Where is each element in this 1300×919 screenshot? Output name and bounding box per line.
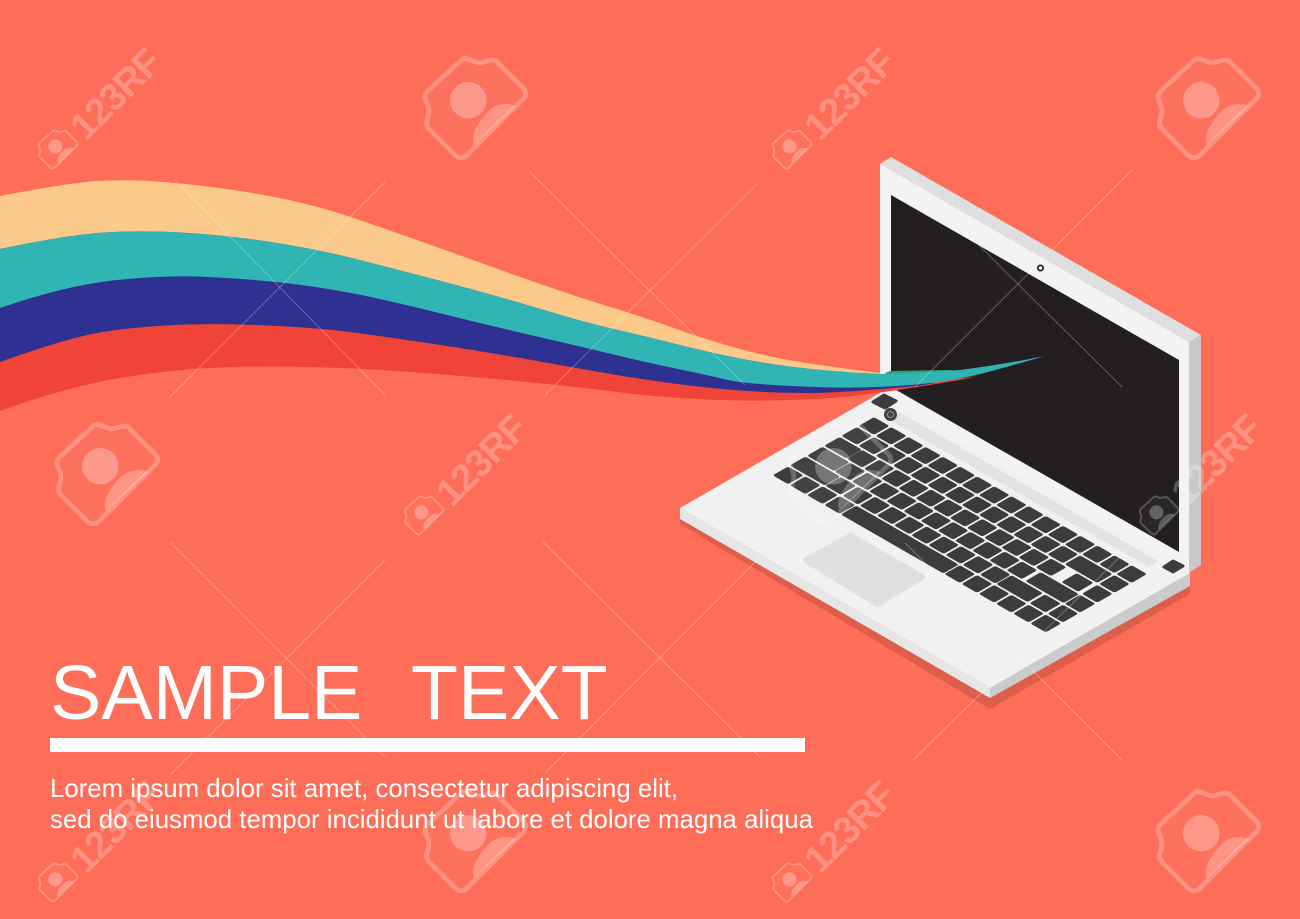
watermark top centre [773,42,903,169]
laptop base front edges [680,508,1190,698]
watermark bottom centre: 123RF [797,775,903,881]
watermark top centre: 123RF [797,42,903,148]
ribbon band: blue [0,231,935,393]
touchpad [806,536,922,604]
watermark middle right [1140,408,1270,535]
watermark middle left: 123RF [429,408,535,514]
watermark lines [170,170,1132,775]
top key [873,395,896,408]
keyboard [774,418,1146,631]
watermark top left [39,42,169,169]
side key [1164,561,1183,572]
watermark bottom left: 123RF [63,775,169,881]
body text [50,775,814,834]
title: SAMPLE [50,650,362,736]
watermark middle left [405,408,535,535]
screen display [891,195,1179,552]
ribbon band: peach [0,180,885,388]
watermark bottom centre [773,775,903,902]
ribbon band: red [0,276,978,411]
watermark top left: 123RF [63,42,169,148]
title: TEXT [411,650,608,736]
laptop illustration [680,157,1201,709]
ribbon band: green sliver [885,370,962,377]
laptop base top [680,393,1190,688]
watermark bottom left [39,775,169,902]
laptop ground shadow [680,516,1190,709]
icon: webcam [1038,265,1043,271]
hinge strip [891,412,1158,567]
body text: Lorem ipsum dolor sit amet, consectetur adipiscing elit, [50,775,678,803]
laptop screen lid [880,157,1201,573]
watermark middle right: 123RF [1164,408,1270,514]
title underline [50,738,805,752]
ribbon band: teal [0,231,1045,388]
icon: power button [884,408,897,421]
body text: sed do eiusmod tempor incididunt ut labore et dolore magna aliqua [50,806,814,834]
rainbow ribbon [0,180,1045,411]
